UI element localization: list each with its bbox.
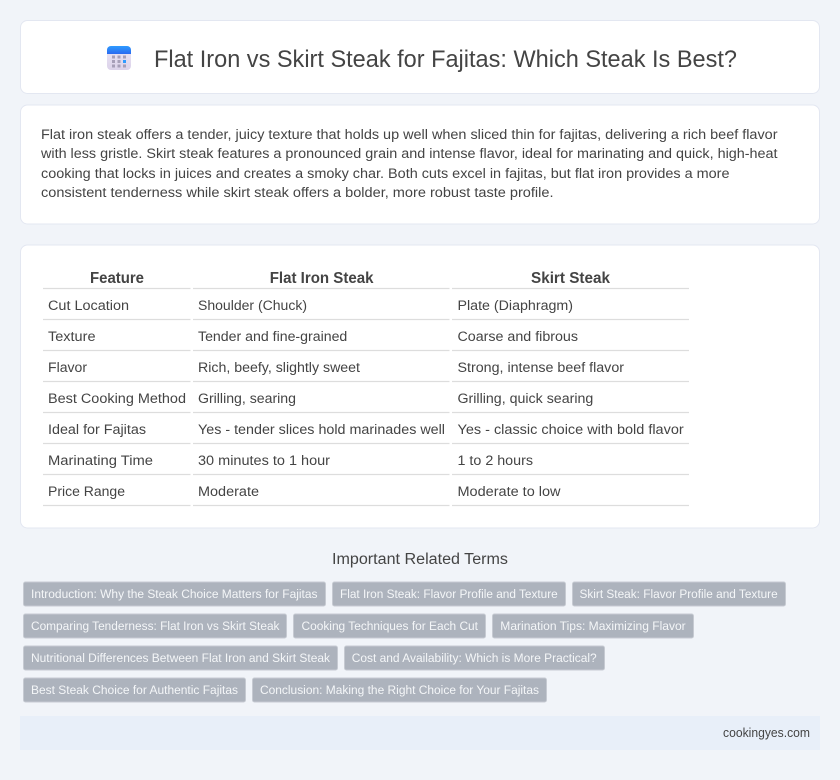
table header row: Flat Iron Steak (270, 270, 374, 287)
row: price range: Price Range (48, 484, 125, 500)
footer: cookingyes.com (723, 726, 810, 740)
panel: comparison table (20, 245, 820, 528)
row: best cooking method: Grilling, searing (198, 391, 296, 407)
row: flavor (43, 360, 689, 382)
row: flavor: Strong, intense beef flavor (458, 360, 624, 376)
related term tags (24, 582, 786, 702)
related term tags: Introduction: Why the Steak Choice Matters for Fajitas (31, 587, 318, 601)
table header row: Feature (90, 270, 144, 287)
table header row: Skirt Steak (531, 270, 610, 287)
row: texture: Tender and fine-grained (198, 329, 347, 345)
related term tags: Marination Tips: Maximizing Flavor (500, 619, 686, 633)
header panel (20, 20, 820, 94)
row: best cooking method: Best Cooking Method (48, 391, 186, 407)
related term tags: Skirt Steak: Flavor Profile and Texture (580, 587, 778, 601)
row: ideal for fajitas: Yes - classic choice with bold flavor (458, 422, 684, 438)
row: marinating time: 1 to 2 hours (458, 453, 533, 469)
row: ideal for fajitas (43, 422, 689, 444)
related term tags: Conclusion: Making the Right Choice for Your Fajitas (260, 683, 539, 697)
intro paragraph: Flat iron steak offers a tender, juicy texture that holds up well when sliced thin for fajitas, delivering a rich beef flavor (41, 127, 778, 143)
related term tags: Comparing Tenderness: Flat Iron vs Skirt Steak (31, 619, 280, 633)
row: texture: Coarse and fibrous (458, 329, 578, 345)
table header row (43, 270, 689, 288)
intro paragraph: cooking that locks in juices and creates a smoky char. Both cuts excel in fajitas, but flat iron provides a more (41, 166, 730, 182)
intro paragraph: with less gristle. Skirt steak features a pronounced grain and intense flavor, ideal for marinating and quick, high-heat (40, 146, 778, 162)
title: Flat Iron vs Skirt Steak for Fajitas: Which Steak Is Best? (154, 46, 737, 73)
footer (20, 716, 820, 750)
row: marinating time: Marinating Time (48, 453, 153, 469)
row: price range: Moderate (198, 484, 259, 500)
row: best cooking method (43, 391, 689, 412)
row: texture: Texture (48, 329, 96, 345)
row: texture (43, 329, 689, 350)
intro paragraph (40, 127, 778, 201)
intro paragraph: consistent tenderness while skirt steak offers a bolder, more robust taste profile. (41, 185, 554, 201)
related term tags: Flat Iron Steak: Flavor Profile and Texture (340, 587, 558, 601)
related term tags: Cooking Techniques for Each Cut (302, 619, 479, 633)
row: cut location (43, 298, 689, 320)
row: price range: Moderate to low (458, 484, 561, 500)
row: flavor: Rich, beefy, slightly sweet (198, 360, 360, 376)
row: ideal for fajitas: Yes - tender slices hold marinades well (198, 422, 445, 438)
row: marinating time (43, 453, 689, 474)
icon: calendar (107, 46, 131, 70)
row: ideal for fajitas: Ideal for Fajitas (48, 422, 146, 438)
row: best cooking method: Grilling, quick searing (458, 391, 593, 407)
row: cut location: Cut Location (48, 298, 129, 314)
row: cut location: Shoulder (Chuck) (198, 298, 307, 314)
panel: introduction (20, 105, 820, 224)
related term tags: Nutritional Differences Between Flat Iron and Skirt Steak (31, 651, 331, 665)
related term tags: Cost and Availability: Which is More Practical? (352, 651, 597, 665)
row: cut location: Plate (Diaphragm) (458, 298, 573, 314)
related term tags: Best Steak Choice for Authentic Fajitas (31, 683, 238, 697)
heading: important related terms: Important Related Terms (332, 551, 508, 568)
row: marinating time: 30 minutes to 1 hour (198, 453, 330, 469)
row: price range (43, 484, 689, 506)
row: flavor: Flavor (48, 360, 87, 376)
